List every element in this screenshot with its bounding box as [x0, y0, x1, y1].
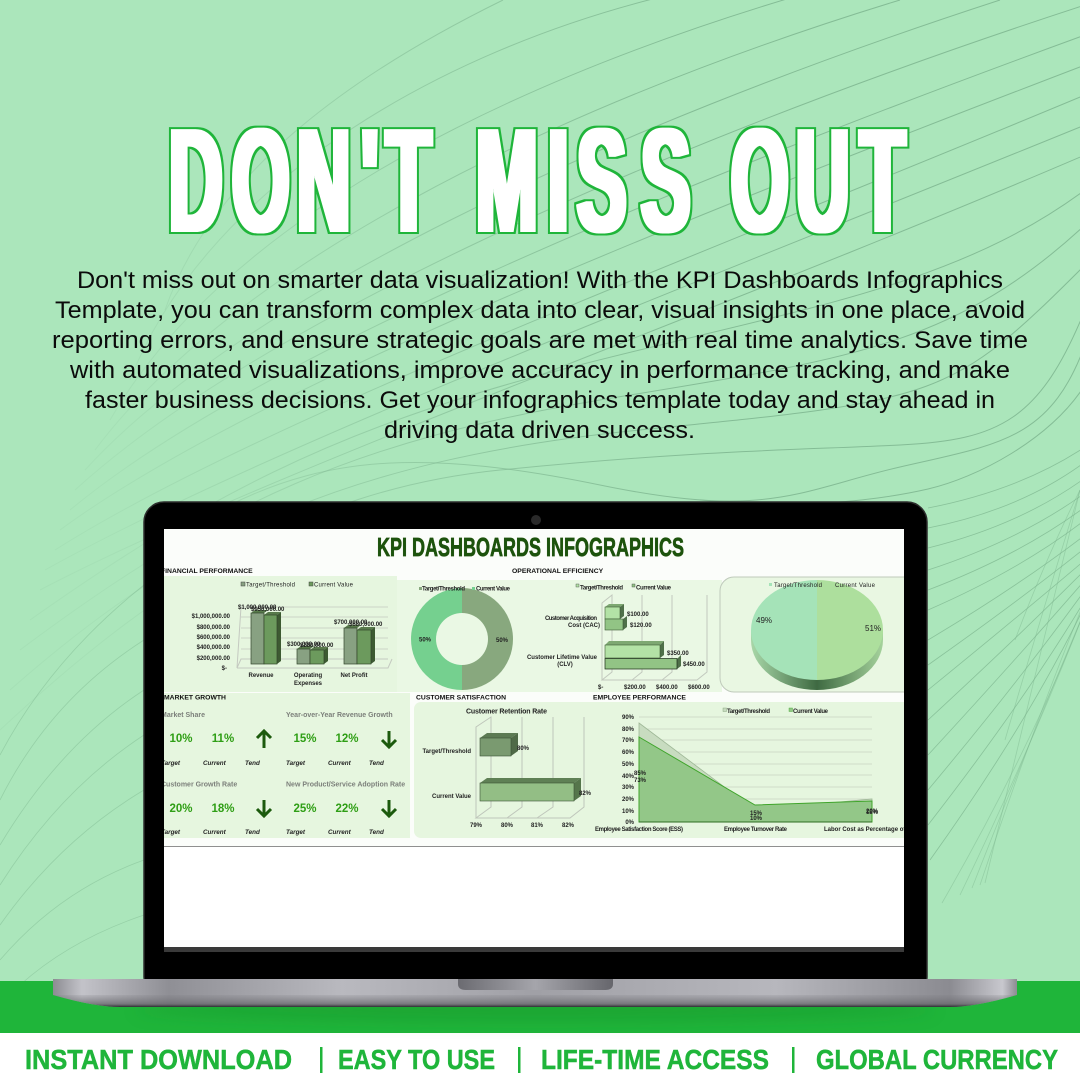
- retention bar chart: 80%: [501, 823, 514, 829]
- bar chart: $1,000,000.00: [192, 614, 231, 620]
- laptop: [53, 502, 1017, 1022]
- pie: 49%: [756, 616, 772, 625]
- bar chart: $680,000.00: [349, 622, 383, 628]
- horizontal bar chart: [527, 584, 710, 691]
- bar chart: $950,000.00: [251, 607, 285, 613]
- description text: Don't miss out on smarter data visualization! With the KPI Dashboards Infographics: [77, 267, 1003, 294]
- donut chart: [411, 586, 513, 690]
- area chart: Current Value: [793, 709, 829, 715]
- description text: reporting errors, and ensure strategic goals are met with real time analytics. Save time: [52, 327, 1028, 354]
- footer labels: [25, 1044, 1058, 1075]
- area chart: 18%: [866, 810, 879, 816]
- bottom sheet line: [164, 846, 904, 847]
- area chart: 10%: [622, 809, 635, 815]
- footer labels: INSTANT DOWNLOAD: [25, 1044, 292, 1075]
- arrow down: [257, 800, 271, 816]
- area chart: 60%: [622, 750, 635, 756]
- bar chart: Operating: [294, 673, 322, 679]
- KPI: customer growth rate: 18%: [211, 803, 235, 815]
- arrow down: [382, 800, 396, 816]
- retention bar chart: Target/Threshold: [422, 749, 471, 755]
- screen: [164, 529, 904, 947]
- KPI: market share: 10%: [169, 733, 193, 745]
- area chart: 15%: [750, 811, 763, 817]
- legend: Target/Threshold: [246, 582, 295, 588]
- retention bar chart: 81%: [531, 823, 544, 829]
- area chart: Employee Satisfaction Score (ESS): [595, 827, 683, 833]
- horizontal bar chart: $120.00: [630, 623, 652, 629]
- KPI: customer growth rate: 20%: [169, 803, 193, 815]
- laptop base: [53, 979, 1017, 1007]
- KPI: market share: Market Share: [161, 712, 205, 719]
- KPI: market share: [161, 712, 271, 767]
- retention bar chart: Current Value: [432, 794, 472, 800]
- KPI: new product adoption rate: [286, 782, 405, 836]
- horizontal bar chart: Target/Threshold: [580, 586, 623, 592]
- KPI: new product adoption rate: Current: [328, 829, 352, 836]
- KPI: new product adoption rate: 22%: [335, 803, 359, 815]
- horizontal bar chart: (CLV): [557, 662, 573, 668]
- pie: [751, 580, 883, 690]
- KPI: year-over-year revenue growth: 12%: [335, 733, 359, 745]
- horizontal bar chart: Current Value: [636, 586, 672, 592]
- KPI: year-over-year revenue growth: Current: [328, 760, 352, 767]
- horizontal bar chart: $600.00: [688, 685, 710, 691]
- area chart: 20%: [622, 797, 635, 803]
- KPI: customer growth rate: Customer Growth Rate: [161, 782, 237, 788]
- bar chart: Net Profit: [340, 673, 368, 679]
- horizontal bar chart: $350.00: [667, 651, 689, 657]
- area chart: Target/Threshold: [727, 709, 770, 715]
- screen lower strip: [164, 947, 904, 952]
- legend: Current Value: [835, 583, 876, 589]
- legend: [241, 582, 354, 588]
- area chart: 73%: [634, 778, 647, 784]
- area chart: Employee Turnover Rate: [724, 827, 788, 833]
- dashboard title: KPI DASHBOARDS INFOGRAPHICS: [377, 532, 684, 562]
- description text: [52, 267, 1028, 444]
- heading: MARKET GROWTH: [164, 694, 226, 702]
- heading: EMPLOYEE PERFORMANCE: [593, 694, 686, 702]
- area chart: 90%: [622, 715, 635, 721]
- arrow down: [382, 731, 396, 747]
- retention bar chart: [422, 708, 592, 829]
- bar chart: Revenue: [248, 673, 274, 679]
- laptop base lower shade: [53, 995, 1017, 1007]
- panel: operational efficiency: [397, 568, 722, 692]
- dashboard top background: [386, 538, 684, 556]
- bar chart: $200,000.00: [197, 656, 231, 662]
- horizontal bar chart: $450.00: [683, 662, 705, 668]
- area chart: 0%: [625, 820, 635, 826]
- retention bar chart: Customer Retention Rate: [466, 708, 547, 716]
- horizontal bar chart: Customer Acquisition: [545, 616, 597, 622]
- donut chart: Current Value: [476, 586, 511, 592]
- horizontal bar chart: Cost (CAC): [568, 623, 600, 629]
- area chart: 30%: [622, 785, 635, 791]
- area chart: 40%: [622, 774, 635, 780]
- webcam: [531, 515, 541, 525]
- retention bar chart: 82%: [579, 791, 592, 797]
- bar chart: $400,000.00: [197, 645, 231, 651]
- area chart: 20%: [866, 809, 879, 815]
- description text: driving data driven success.: [384, 417, 695, 444]
- title: OUT: [731, 97, 905, 263]
- green band: [0, 981, 1080, 1033]
- panel: customer satisfaction and employee performance: [414, 694, 933, 838]
- bar chart: [192, 605, 392, 687]
- laptop notch: [458, 979, 613, 990]
- area chart: Labor Cost as Percentage of Revenue: [824, 827, 933, 833]
- title: DON'T: [169, 97, 431, 263]
- KPI: new product adoption rate: 25%: [293, 803, 317, 815]
- heading: FINANCIAL PERFORMANCE: [161, 568, 253, 575]
- KPI: year-over-year revenue growth: Year-over-Year Revenue Growth: [286, 712, 393, 719]
- donut chart: Target/Threshold: [422, 586, 465, 592]
- bar chart: $700,000.00: [334, 620, 368, 626]
- white footer strip: [0, 1033, 1080, 1080]
- KPI: customer growth rate: Current: [203, 829, 227, 836]
- area chart: [595, 708, 933, 833]
- KPI: new product adoption rate: Target: [286, 829, 306, 836]
- title: MISS: [476, 97, 690, 263]
- KPI: market share: 11%: [212, 733, 234, 745]
- horizontal bar chart: Customer Lifetime Value: [527, 655, 598, 661]
- laptop bezel: [144, 502, 927, 997]
- description text: Template, you can transform complex data into clear, visual insights in one place, avoid: [55, 297, 1025, 324]
- bar chart: $-: [222, 666, 227, 672]
- bar chart: $1,000,000.00: [238, 605, 277, 611]
- horizontal bar chart: $400.00: [656, 685, 678, 691]
- description text: with automated visualizations, improve accuracy in performance tracking, and make: [69, 357, 1010, 384]
- KPI: market share: Target: [161, 760, 181, 767]
- horizontal bar chart: $200.00: [624, 685, 646, 691]
- footer labels: EASY TO USE: [338, 1044, 495, 1075]
- title: [169, 97, 905, 263]
- area chart: 80%: [622, 727, 635, 733]
- dashboard: [161, 529, 933, 847]
- footer labels: LIFE-TIME ACCESS: [541, 1044, 769, 1075]
- legend: [769, 583, 876, 589]
- retention bar chart: 80%: [517, 746, 530, 752]
- bar chart: $800,000.00: [197, 625, 231, 631]
- donut chart: 50%: [419, 638, 432, 644]
- KPI: year-over-year revenue growth: 15%: [293, 733, 317, 745]
- KPI: year-over-year revenue growth: Target: [286, 760, 306, 767]
- pie: 51%: [865, 624, 881, 633]
- bar chart: Expenses: [294, 681, 323, 687]
- panel: pie chart: [720, 577, 920, 692]
- horizontal bar chart: $-: [598, 685, 603, 691]
- area chart: 70%: [622, 738, 635, 744]
- KPI: customer growth rate: Tend: [245, 829, 260, 836]
- arrow up: [257, 731, 271, 748]
- retention bar chart: 79%: [470, 823, 483, 829]
- KPI: market share: Tend: [245, 760, 260, 767]
- panel: financial performance: [161, 568, 397, 692]
- bar chart: $600,000.00: [197, 635, 231, 641]
- KPI: year-over-year revenue growth: Tend: [369, 760, 384, 767]
- bar chart: $300,000.00: [287, 642, 321, 648]
- area chart: 10%: [750, 816, 763, 822]
- laptop shadow: [135, 998, 935, 1022]
- horizontal bar chart: $100.00: [627, 612, 649, 618]
- bar chart: $280,000.00: [300, 643, 334, 649]
- KPI: new product adoption rate: New Product/Service Adoption Rate: [286, 782, 405, 788]
- legend: Target/Threshold: [774, 583, 822, 589]
- donut chart: 50%: [496, 638, 509, 644]
- heading: CUSTOMER SATISFACTION: [416, 694, 506, 702]
- area chart: 50%: [622, 762, 635, 768]
- retention bar chart: 82%: [562, 823, 575, 829]
- KPI: customer growth rate: [161, 782, 271, 836]
- KPI: year-over-year revenue growth: [286, 712, 396, 767]
- KPI: new product adoption rate: Tend: [369, 829, 384, 836]
- KPI: market share: Current: [203, 760, 227, 767]
- description text: faster business decisions. Get your infographics template today and stay ahead in: [85, 387, 995, 414]
- heading: OPERATIONAL EFFICIENCY: [512, 568, 604, 575]
- panel: market growth: [161, 693, 410, 838]
- area chart: 85%: [634, 771, 647, 777]
- legend: Current Value: [314, 582, 354, 588]
- KPI: customer growth rate: Target: [161, 829, 181, 836]
